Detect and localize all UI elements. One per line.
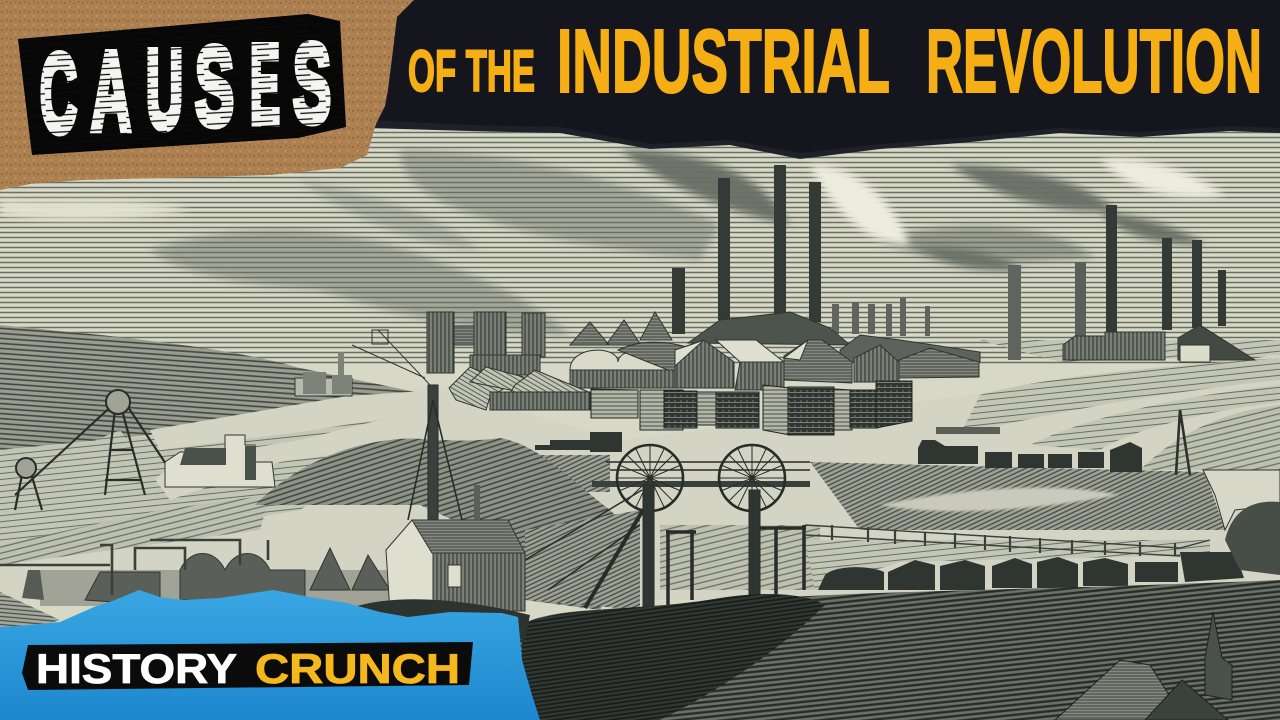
fence and railway tunnel (805, 470, 1280, 575)
dark foreground hill (340, 580, 1280, 720)
title: of the industrial revolution: INDUSTRIAL (557, 12, 890, 112)
heading: causes: S (293, 21, 331, 146)
title: of the industrial revolution: OF THE (408, 39, 535, 104)
ironworks furnaces (427, 312, 545, 375)
label: causes (18, 14, 346, 156)
long sheds (449, 367, 591, 410)
rolling hills (0, 325, 1280, 610)
coal stacks (591, 381, 912, 435)
blue torn brand panel (0, 590, 540, 720)
engine house and gas works (0, 485, 525, 640)
heading: causes: E (250, 22, 280, 147)
locomotive trains (535, 410, 1244, 590)
heading: causes (40, 21, 331, 156)
brand label: history crunch: CRUNCH (255, 645, 460, 692)
factory buildings (570, 312, 980, 390)
title: of the industrial revolution (408, 12, 1262, 112)
torn cork panel (0, 0, 414, 190)
black torn title banner (370, 0, 1280, 159)
brand label: history crunch: HISTORY (36, 645, 237, 692)
heading: causes: U (146, 27, 183, 152)
brand label: history crunch (22, 642, 473, 692)
heading: causes: C (40, 31, 77, 156)
heading: causes: S (195, 24, 234, 149)
left pit head and cottages (15, 330, 430, 510)
winding gear headframe (408, 385, 810, 610)
smoke clouds (0, 125, 1280, 365)
right factory group (1063, 325, 1255, 362)
heading: causes: A (91, 29, 131, 154)
factory chimneys (672, 165, 1226, 360)
